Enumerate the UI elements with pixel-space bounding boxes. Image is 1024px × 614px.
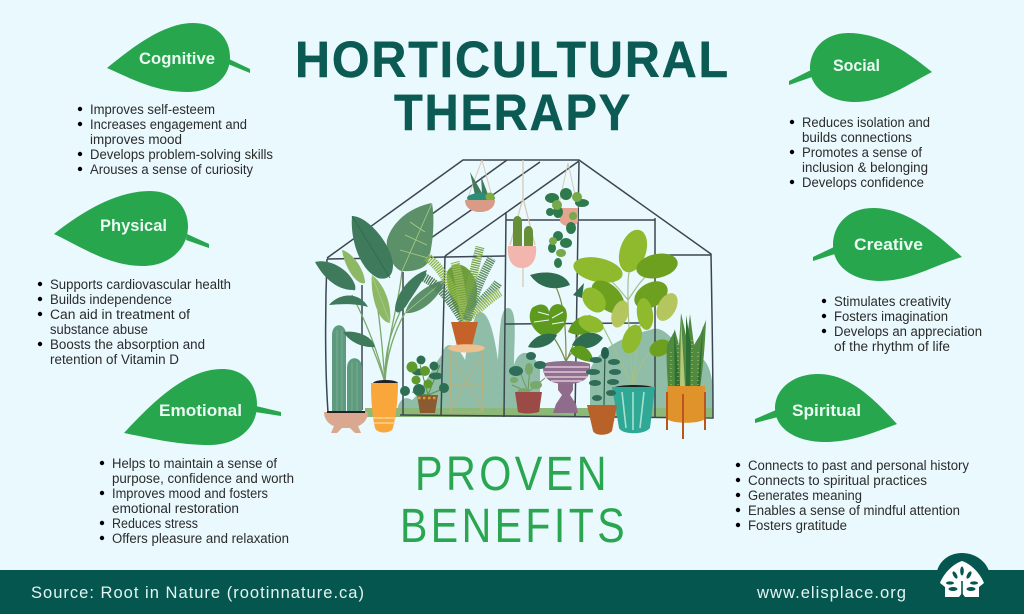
list: social: builds connections (802, 130, 912, 145)
list: social: Promotes a sense of (802, 145, 922, 160)
list: creative: of the rhythm of life (834, 339, 950, 354)
plant: hanging cactus in macrame (508, 160, 536, 287)
panel: spiritual (736, 374, 969, 533)
leaf: physical (54, 191, 209, 266)
list: spiritual: Connects to past and personal history (748, 458, 969, 473)
list: emotional: Helps to maintain a sense of (112, 456, 277, 471)
list: cognitive: Arouses a sense of curiosity (90, 162, 253, 177)
plant: prayer plant in red basket (509, 352, 546, 414)
leaf: emotional (124, 369, 281, 445)
title (295, 31, 730, 141)
plant: fern on stand (423, 247, 500, 412)
list: spiritual: Fosters gratitude (748, 518, 847, 533)
greenhouse frame (326, 160, 713, 418)
heading: social: Social (833, 56, 880, 75)
heading: spiritual: Spiritual (792, 401, 861, 420)
list: social (790, 115, 930, 190)
illustration: greenhouse with plants (315, 160, 713, 439)
list: physical: Can aid in treatment of (50, 307, 190, 322)
list: emotional (100, 456, 294, 546)
heading: creative: Creative (854, 235, 923, 254)
list: spiritual (736, 458, 969, 533)
list: physical: Builds independence (50, 292, 172, 307)
leaf: spiritual (755, 374, 897, 442)
plant: large rubber plant in teal pot (571, 226, 682, 433)
list: physical: retention of Vitamin D (50, 352, 179, 367)
list: physical: substance abuse (50, 322, 148, 337)
list: physical: Boosts the absorption and (50, 337, 205, 352)
plant: tall bird of paradise in yellow pot (315, 203, 445, 432)
leaf: cognitive (107, 23, 250, 92)
list: physical: Supports cardiovascular health (50, 277, 231, 292)
heading: physical: Physical (100, 216, 167, 235)
title: THERAPY (394, 84, 632, 141)
footer bar (0, 570, 1024, 614)
list: spiritual: Generates meaning (748, 488, 862, 503)
list: social: Develops confidence (802, 175, 924, 190)
list: spiritual: Enables a sense of mindful attention (748, 503, 960, 518)
leaf: social (789, 33, 932, 102)
list: cognitive: improves mood (90, 132, 182, 147)
panel: cognitive (78, 23, 273, 177)
background shrubs and floor (365, 308, 713, 417)
list: creative: Develops an appreciation (834, 324, 982, 339)
list: creative: Fosters imagination (834, 309, 948, 324)
list: emotional: Improves mood and fosters (112, 486, 268, 501)
plant: monstera in purple pot (528, 272, 603, 413)
heading: cognitive: Cognitive (139, 49, 215, 68)
website text: www.elisplace.org (756, 584, 907, 602)
list: social: inclusion & belonging (802, 160, 928, 175)
list: cognitive: Improves self-esteem (90, 102, 215, 117)
logo (937, 553, 989, 597)
panel: social (789, 33, 932, 190)
list: emotional: Reduces stress (112, 516, 198, 531)
list: social: Reduces isolation and (802, 115, 930, 130)
title: HORTICULTURAL (295, 31, 730, 88)
list: physical (38, 277, 231, 367)
list: emotional: Offers pleasure and relaxation (112, 531, 289, 546)
heading: emotional: Emotional (159, 401, 242, 420)
panel: emotional (100, 369, 294, 546)
plant: small dark plant in terracotta pot (586, 347, 621, 435)
panel: creative (813, 208, 982, 354)
plant: pilea in brown pot (400, 356, 449, 413)
list: cognitive: Increases engagement and (90, 117, 247, 132)
plant: snake plant in orange planter (667, 313, 706, 439)
plant: hanging succulent basket (465, 160, 495, 212)
list: emotional: purpose, confidence and worth (112, 471, 294, 486)
list: creative: Stimulates creativity (834, 294, 951, 309)
panel: physical (38, 191, 231, 367)
list: cognitive (78, 102, 273, 177)
subtitle: proven benefits (400, 448, 628, 553)
list: spiritual: Connects to spiritual practices (748, 473, 927, 488)
plant: potted cactus (324, 325, 368, 433)
list: cognitive: Develops problem-solving skills (90, 147, 273, 162)
source text: Source: Root in Nature (rootinnature.ca) (31, 584, 365, 602)
subtitle: proven benefits: BENEFITS (400, 500, 628, 553)
plant: hanging ivy (545, 163, 589, 268)
subtitle: proven benefits: PROVEN (415, 448, 610, 501)
list: emotional: emotional restoration (112, 501, 239, 516)
list: creative (822, 294, 982, 354)
leaf: creative (813, 208, 962, 281)
